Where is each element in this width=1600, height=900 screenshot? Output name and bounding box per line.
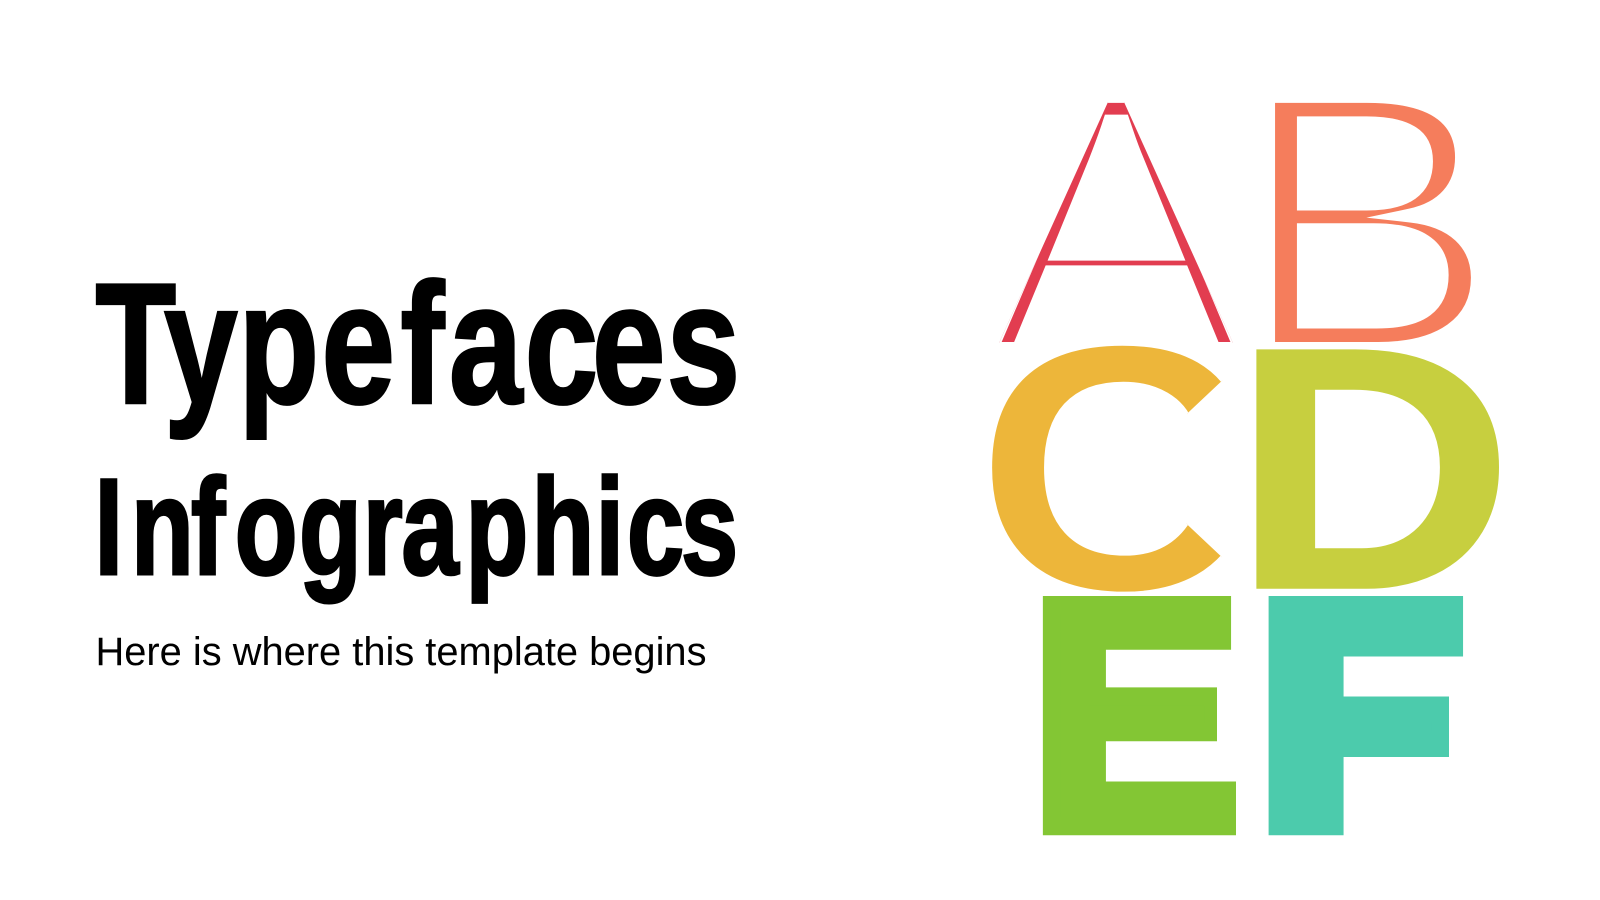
title line: Infographics: Infographics (94, 450, 738, 603)
subtitle: Here is where this template begins (96, 630, 706, 674)
letter F, heavy teal: F (1260, 542, 1461, 888)
title line: Typefaces: Typefaces (95, 247, 740, 440)
letter E, heavy green: E (1031, 536, 1241, 895)
title block (94, 247, 740, 603)
letter C, bold yellow: C (974, 271, 1254, 665)
letter B, thin orange: B (1235, 17, 1499, 428)
letter D, bold lime: D (1231, 277, 1514, 662)
letter A, thin red: A (983, 9, 1251, 435)
letter grid (992, 102, 1499, 836)
